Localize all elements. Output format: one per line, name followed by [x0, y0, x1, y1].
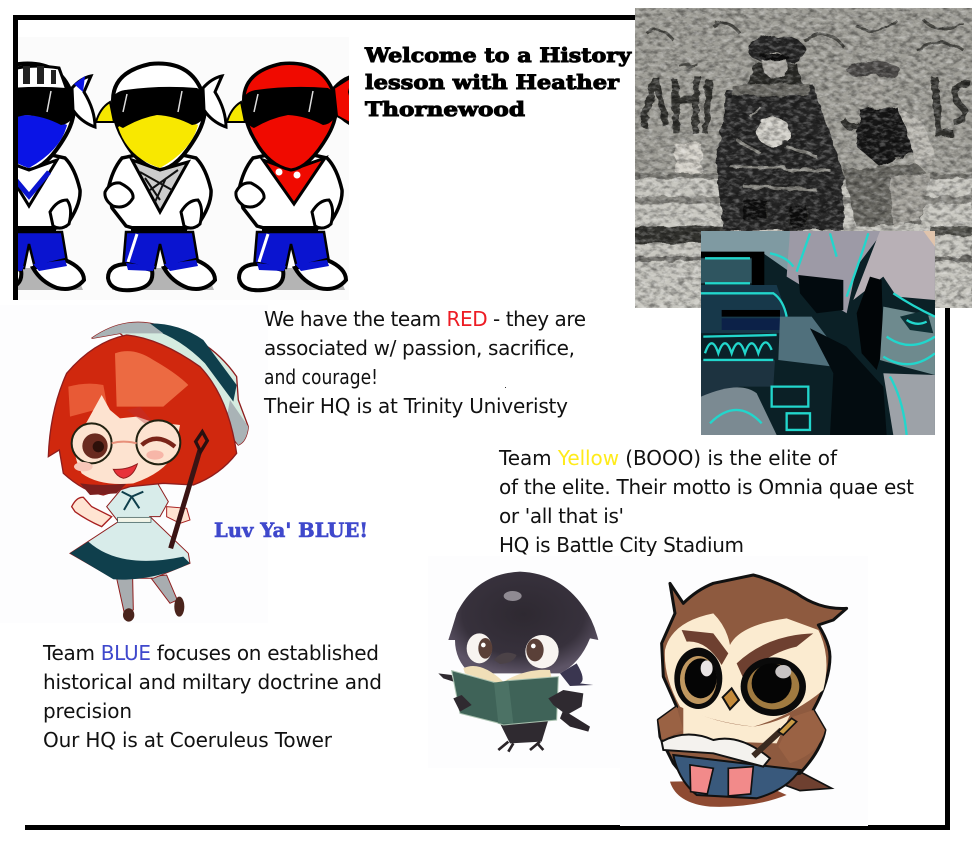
figure: right	[843, 61, 937, 227]
legs	[117, 575, 177, 612]
image: grayscale photograph of two figures	[630, 8, 972, 310]
stray dot	[505, 387, 506, 388]
image: chibi girl with pointer	[0, 305, 268, 623]
image: three masked characters	[18, 62, 349, 292]
character: red	[227, 64, 359, 290]
wall lettering	[643, 75, 970, 133]
blue legs	[673, 755, 800, 798]
hair	[48, 335, 237, 495]
shadow	[670, 780, 787, 807]
image: teal stylized figure	[701, 231, 935, 435]
hat	[92, 322, 248, 445]
text: team yellow: HQ is Battle City Stadium	[499, 533, 744, 557]
text: team blue: Team BLUE focuses on established	[42, 641, 379, 665]
title: lesson with Heather	[365, 70, 620, 94]
tail	[780, 770, 832, 791]
arm	[72, 497, 112, 527]
lower ledge bands	[630, 173, 972, 310]
text: team red: We have the team RED - they are	[264, 307, 586, 331]
text: luv ya blue: Luv Ya' BLUE!	[214, 518, 368, 542]
feet	[690, 765, 753, 796]
text: team red: and courage!	[264, 365, 378, 389]
image: crow reading a book	[428, 556, 620, 768]
title: Welcome to a History	[364, 43, 633, 67]
book	[662, 735, 770, 767]
pointer	[171, 450, 200, 548]
text: team red	[263, 307, 586, 418]
face	[75, 395, 180, 484]
eyes	[674, 648, 722, 709]
text: team red: Their HQ is at Trinity Univeristy	[263, 394, 568, 418]
beak	[723, 688, 739, 709]
text: team blue	[42, 641, 382, 752]
face	[665, 613, 826, 727]
text: team yellow: of the elite. Their motto is Omnia quae est	[499, 475, 914, 499]
text: team blue: Our HQ is at Coeruleus Tower	[43, 728, 333, 752]
pencil	[753, 730, 782, 756]
text: team red: associated w/ passion, sacrifice,	[264, 336, 575, 360]
character: blue	[18, 62, 96, 291]
text: team yellow	[498, 446, 914, 557]
image: owl reading a book	[620, 556, 868, 826]
figure: left	[717, 35, 843, 230]
dress	[70, 482, 190, 578]
text: team blue: precision	[43, 699, 132, 723]
owl body	[658, 575, 847, 780]
glasses	[72, 423, 112, 463]
text: team yellow: or 'all that is'	[499, 504, 624, 528]
text: team blue: historical and miltary doctrine and	[43, 670, 382, 694]
title	[364, 43, 633, 121]
character: yellow	[96, 64, 226, 290]
chest	[683, 707, 790, 743]
title: Thornewood	[365, 97, 525, 121]
text: team yellow: Team Yellow (BOOO) is the elite of	[498, 446, 838, 470]
